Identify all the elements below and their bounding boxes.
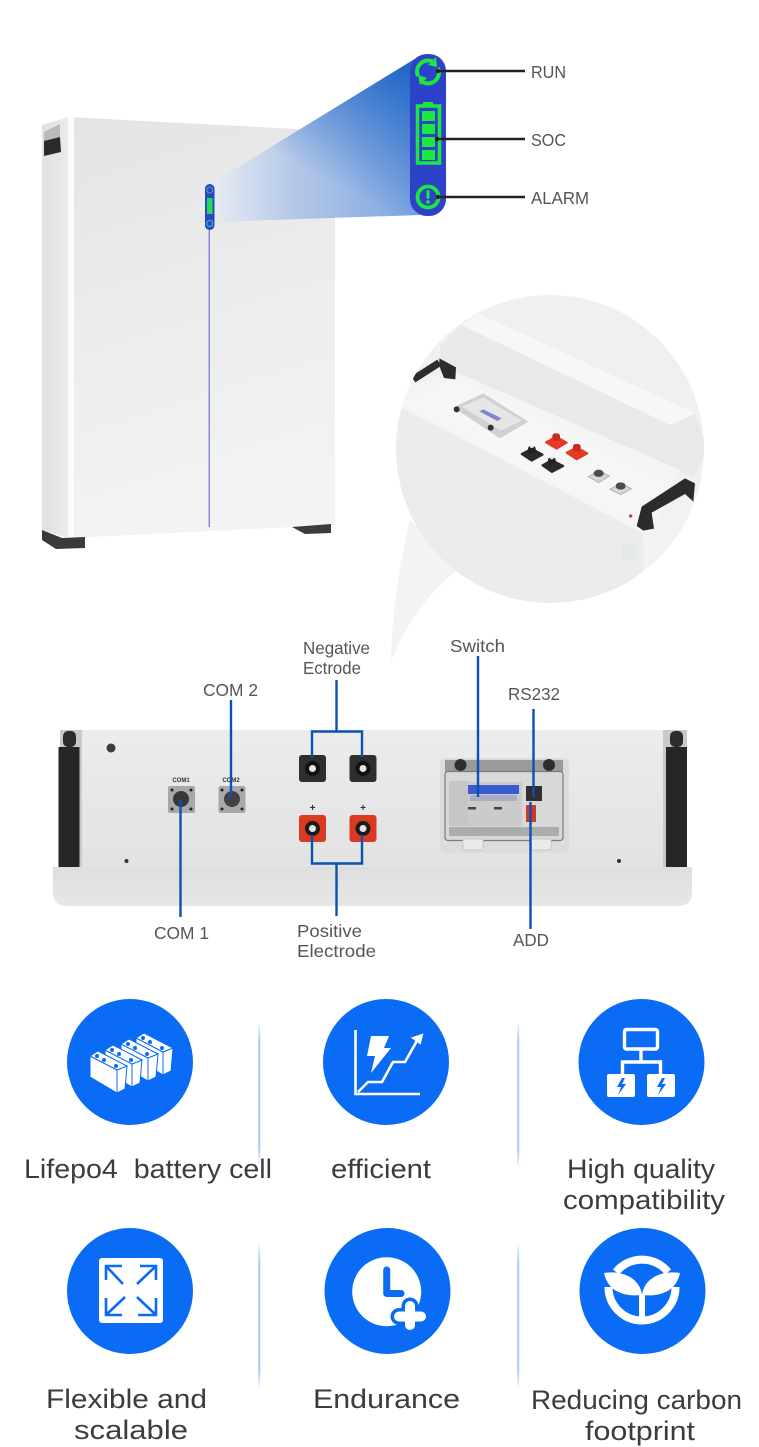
label: Negative Ectrode <box>303 638 370 678</box>
top surface <box>400 377 667 533</box>
right handle <box>663 730 687 867</box>
label: SOC: SOC <box>531 130 566 150</box>
label: Positive Electrode: Positive <box>297 921 362 941</box>
caption: efficient <box>331 1154 432 1184</box>
icon: leaf in ring <box>604 1260 680 1324</box>
front panel of module <box>53 730 692 906</box>
terminal: positive 1 <box>299 803 326 842</box>
icon: run <box>417 57 439 85</box>
terminal: positive 1: + <box>310 803 316 814</box>
label: ALARM: ALARM <box>531 188 589 208</box>
feature: Reducing carbon footprint <box>531 1228 742 1446</box>
feature: Lifepo4 battery cell <box>24 999 272 1184</box>
leader lines and labels: indicators <box>435 62 589 208</box>
terminal: negative 1 <box>299 755 326 782</box>
caption <box>563 1154 726 1215</box>
black terminals <box>522 449 543 461</box>
caption: scalable <box>74 1415 188 1445</box>
caption: Flexible and <box>46 1384 207 1414</box>
caption: Endurance <box>313 1384 460 1414</box>
terminal: negative 2 <box>350 755 376 782</box>
label: Positive Electrode <box>297 921 376 961</box>
battery cabinet <box>42 117 335 549</box>
caption: compatibility <box>563 1185 726 1215</box>
label: Negative Ectrode: Negative <box>303 638 370 658</box>
icon: chart with bolt <box>356 1030 422 1094</box>
indicator panel <box>410 54 446 216</box>
zoom beam <box>212 57 420 222</box>
label: Negative Ectrode: Ectrode <box>303 658 361 678</box>
terminal: positive 2 <box>350 803 376 842</box>
lid <box>704 440 705 458</box>
port: COM1 <box>168 778 195 813</box>
switch box <box>453 393 528 438</box>
icon: battery cells <box>90 1033 173 1093</box>
caption: footprint <box>585 1416 696 1446</box>
caption: High quality <box>567 1154 716 1184</box>
icon: expand arrows <box>99 1258 163 1323</box>
callout lines: front panel <box>180 656 534 929</box>
caption <box>46 1384 207 1445</box>
label: COM 1: COM 1 <box>154 923 209 943</box>
front face <box>393 403 643 617</box>
feature: Flexible and scalable <box>46 1228 207 1445</box>
feature: Endurance <box>313 1228 460 1414</box>
magnifier callout tail <box>391 520 460 662</box>
red terminals <box>546 437 567 449</box>
feature: efficient <box>323 999 449 1184</box>
magnifier circle: top view of module <box>393 295 710 617</box>
caption: Lifepo4 battery cell <box>24 1154 272 1184</box>
label: Positive Electrode: Electrode <box>297 941 376 961</box>
terminal: positive 2: + <box>360 803 366 814</box>
icon: alarm <box>418 186 438 208</box>
back handle <box>413 363 439 379</box>
switch box <box>440 758 569 853</box>
icon: network with bolts <box>607 1030 675 1097</box>
label: Switch: Switch <box>450 636 505 656</box>
left handle <box>58 730 82 867</box>
label: RS232: RS232 <box>508 684 560 704</box>
port: COM2: COM2 <box>222 778 240 784</box>
caption: Reducing carbon <box>531 1385 742 1415</box>
label: ADD: ADD <box>513 930 549 950</box>
icon: battery SOC <box>418 102 440 163</box>
label: RUN: RUN <box>531 62 566 82</box>
feature: High quality compatibility <box>563 999 726 1215</box>
port: COM2 <box>218 778 246 813</box>
front handle <box>637 478 695 531</box>
COM ports <box>588 471 609 483</box>
icon: clock plus <box>352 1257 421 1326</box>
caption <box>531 1385 742 1446</box>
label: COM 2: COM 2 <box>203 680 258 700</box>
small indicator strip <box>205 184 214 230</box>
port: COM1: COM1 <box>172 778 190 784</box>
